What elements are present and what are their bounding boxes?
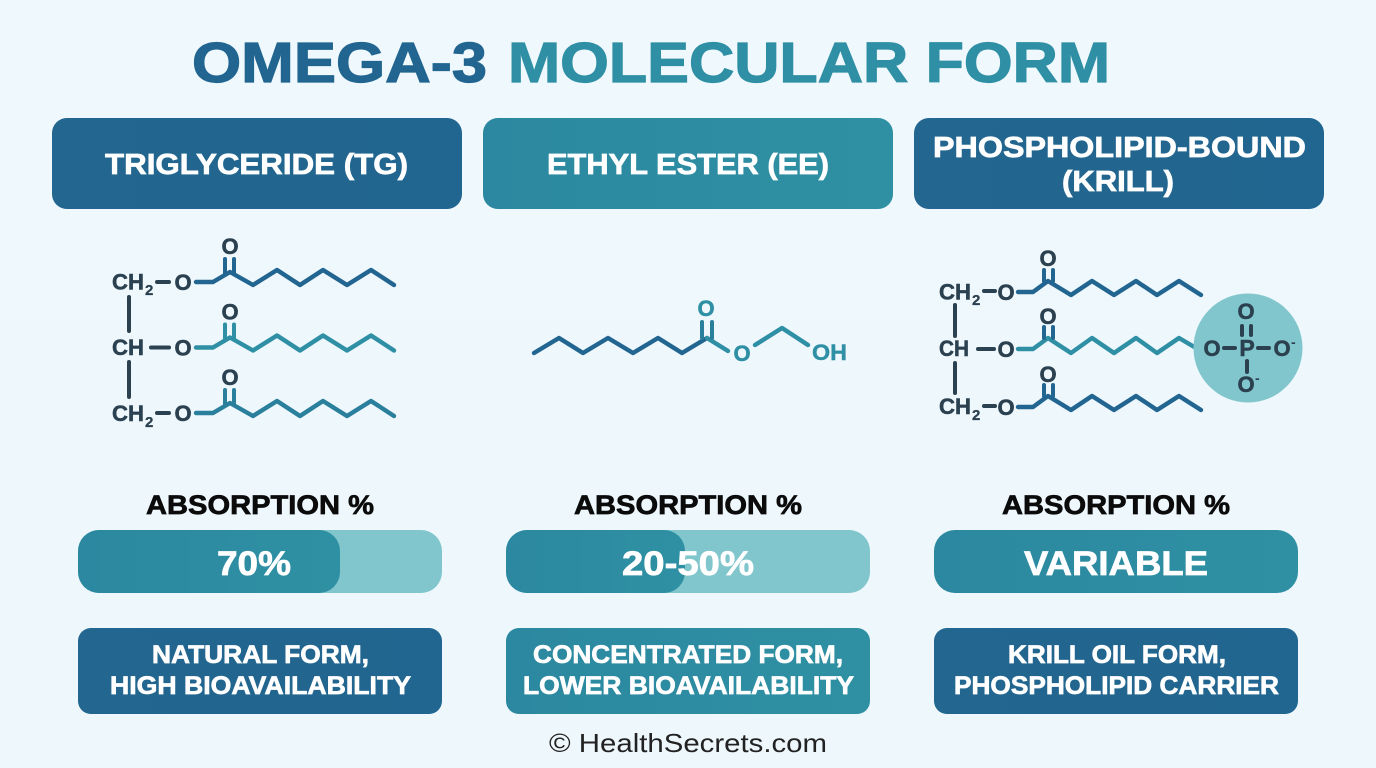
fatty acid chain 2 xyxy=(1018,304,1196,353)
icon: phosphate group: - xyxy=(1255,370,1260,386)
fatty acid chain 1: O xyxy=(221,234,239,259)
chart: triglyceride molecule: O xyxy=(174,270,192,295)
panel: phospholipid header: PHOSPHOLIPID-BOUND xyxy=(933,132,1306,164)
icon: phosphate group: O xyxy=(1237,299,1255,324)
icon: phosphate group: P xyxy=(1239,335,1255,361)
chart: triglyceride molecule: CH xyxy=(112,401,144,426)
heading: absorption EE: ABSORPTION % xyxy=(574,490,802,520)
chart: triglyceride molecule: CH xyxy=(112,335,144,360)
chart: triglyceride molecule xyxy=(112,234,394,431)
callout: krill note: PHOSPHOLIPID CARRIER xyxy=(954,672,1279,700)
callout: TG note xyxy=(78,628,442,714)
chart: ethyl ester molecule: O xyxy=(733,341,751,366)
icon: phosphate group: O xyxy=(1203,336,1221,361)
fatty acid chain 1 xyxy=(196,234,394,285)
callout: krill note: KRILL OIL FORM, xyxy=(1008,641,1226,669)
icon: phosphate group: O xyxy=(1237,372,1255,397)
panel: phospholipid header xyxy=(914,118,1324,209)
bar chart: TG 70%: 70% xyxy=(217,545,291,583)
callout: EE note xyxy=(506,628,870,714)
callout: TG note: HIGH BIOAVAILABILITY xyxy=(110,672,411,700)
title xyxy=(192,31,1110,95)
fatty acid chain 3: O xyxy=(1039,362,1057,387)
chart: phospholipid molecule: CH xyxy=(939,336,969,361)
bar chart: krill variable xyxy=(934,530,1298,593)
title: OMEGA-3 xyxy=(192,31,487,95)
chart: phospholipid molecule: 2 xyxy=(972,292,980,309)
chart: triglyceride molecule: O xyxy=(174,336,192,360)
chart: ethyl ester molecule: O xyxy=(697,296,715,321)
chart: triglyceride molecule: O xyxy=(174,401,192,426)
bar chart: TG 70% xyxy=(78,530,442,593)
panel: triglyceride header: TRIGLYCERIDE (TG) xyxy=(105,149,408,181)
chart: phospholipid molecule: O xyxy=(997,280,1015,305)
icon: phosphate group: - xyxy=(1291,334,1296,350)
fatty acid chain 3: O xyxy=(221,365,239,390)
chart: triglyceride molecule: 2 xyxy=(145,414,153,431)
heading: absorption krill: ABSORPTION % xyxy=(1002,490,1230,520)
chart: ethyl ester molecule: OH xyxy=(812,340,847,365)
fatty acid chain 2 xyxy=(196,300,394,350)
chart: phospholipid molecule: CH xyxy=(939,394,971,419)
chart: triglyceride molecule: CH xyxy=(112,270,144,294)
panel: triglyceride header xyxy=(52,118,462,209)
footer credit: © HealthSecrets.com xyxy=(549,728,827,758)
bar chart: EE 20-50%: 20-50% xyxy=(622,545,754,583)
callout: TG note: NATURAL FORM, xyxy=(152,641,369,669)
bar chart: krill variable: VARIABLE xyxy=(1024,545,1208,583)
title: MOLECULAR FORM xyxy=(508,31,1110,95)
panel: ethyl ester header xyxy=(483,118,893,209)
panel: ethyl ester header: ETHYL ESTER (EE) xyxy=(547,149,829,181)
icon: phosphate group: O xyxy=(1273,336,1291,361)
heading: absorption TG: ABSORPTION % xyxy=(146,490,374,520)
fatty acid chain 1 xyxy=(1018,246,1201,295)
chart: phospholipid molecule: O xyxy=(997,395,1015,420)
fatty acid chain 3 xyxy=(196,365,394,416)
callout: EE note: CONCENTRATED FORM, xyxy=(533,641,843,669)
chart: phospholipid molecule: 2 xyxy=(972,407,980,424)
chart: phospholipid molecule xyxy=(939,246,1302,424)
icon: phosphate group xyxy=(1194,294,1302,402)
bar chart: EE 20-50% xyxy=(506,530,870,593)
chart: triglyceride molecule: 2 xyxy=(145,282,153,299)
fatty acid chain 2: O xyxy=(221,300,239,324)
panel: phospholipid header: (KRILL) xyxy=(1062,166,1174,198)
fatty acid chain 1: O xyxy=(1039,246,1057,271)
callout: krill note xyxy=(934,628,1298,714)
chart: phospholipid molecule: CH xyxy=(939,280,971,304)
callout: EE note: LOWER BIOAVAILABILITY xyxy=(523,672,854,700)
fatty acid chain 2: O xyxy=(1039,304,1057,329)
chart: phospholipid molecule: O xyxy=(997,337,1015,362)
chart: ethyl ester molecule xyxy=(534,296,847,366)
fatty acid chain 3 xyxy=(1018,362,1201,410)
